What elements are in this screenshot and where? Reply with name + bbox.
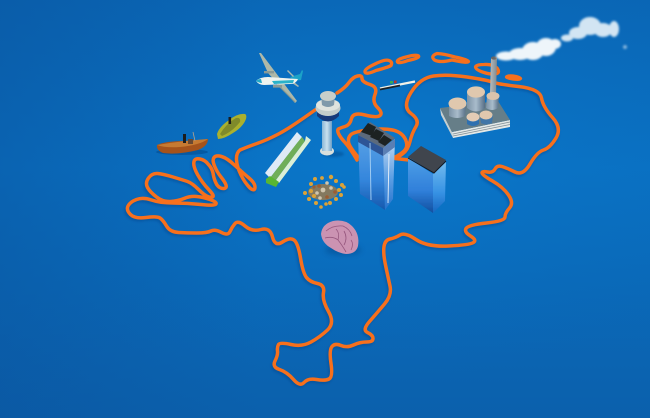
island: Schiermonnikoog: [506, 76, 520, 79]
icon: brown ship: [156, 132, 208, 155]
engines: [264, 71, 274, 73]
icon: pile of coins: [303, 175, 346, 209]
island: Ameland: [476, 64, 498, 74]
fuselage: [256, 77, 298, 85]
tank front left: [467, 117, 479, 126]
left face: [358, 135, 385, 210]
rope: Wadden islands: [365, 54, 520, 79]
icon: chimney smoke cloud: [496, 17, 627, 60]
base: [320, 146, 334, 156]
wing: [259, 53, 297, 103]
tank front right: [480, 115, 493, 124]
icon: brain: [321, 221, 361, 255]
icon: refinery platform: [440, 56, 510, 138]
column: [322, 121, 332, 151]
cab: [321, 96, 335, 107]
island: Texel: [365, 60, 392, 73]
tail: [290, 70, 303, 81]
deck top: [440, 101, 510, 132]
tank left: [449, 104, 466, 118]
icon: left office tower: [358, 122, 395, 210]
rope shadows: [126, 77, 557, 386]
icon: right office tower: [408, 146, 446, 213]
platform: [316, 100, 340, 116]
icon: airplane: [256, 53, 303, 103]
icon: Afsluitdijk bridge: [380, 80, 415, 90]
right face: [383, 139, 395, 210]
tank tall: [467, 92, 485, 112]
icon: green and white packs: [265, 132, 311, 187]
icon: green ship: [217, 114, 246, 139]
blue collar: [317, 112, 339, 122]
island: Vlieland: [397, 55, 419, 63]
island: Terschelling: [433, 54, 468, 62]
chimney: [490, 58, 497, 94]
tanks: [486, 92, 500, 110]
deck sides: [440, 108, 453, 138]
highlight: [370, 143, 371, 200]
tank rear: [486, 96, 499, 110]
roof blocks: [361, 123, 376, 136]
window band: [358, 135, 383, 156]
rope: main coastline of the Netherlands: [127, 75, 558, 384]
icon: control tower: [316, 91, 344, 157]
rope: Flevoland polder: [348, 129, 407, 158]
roof: [358, 122, 395, 148]
rope: IJsselmeer inner coast: [337, 76, 381, 160]
